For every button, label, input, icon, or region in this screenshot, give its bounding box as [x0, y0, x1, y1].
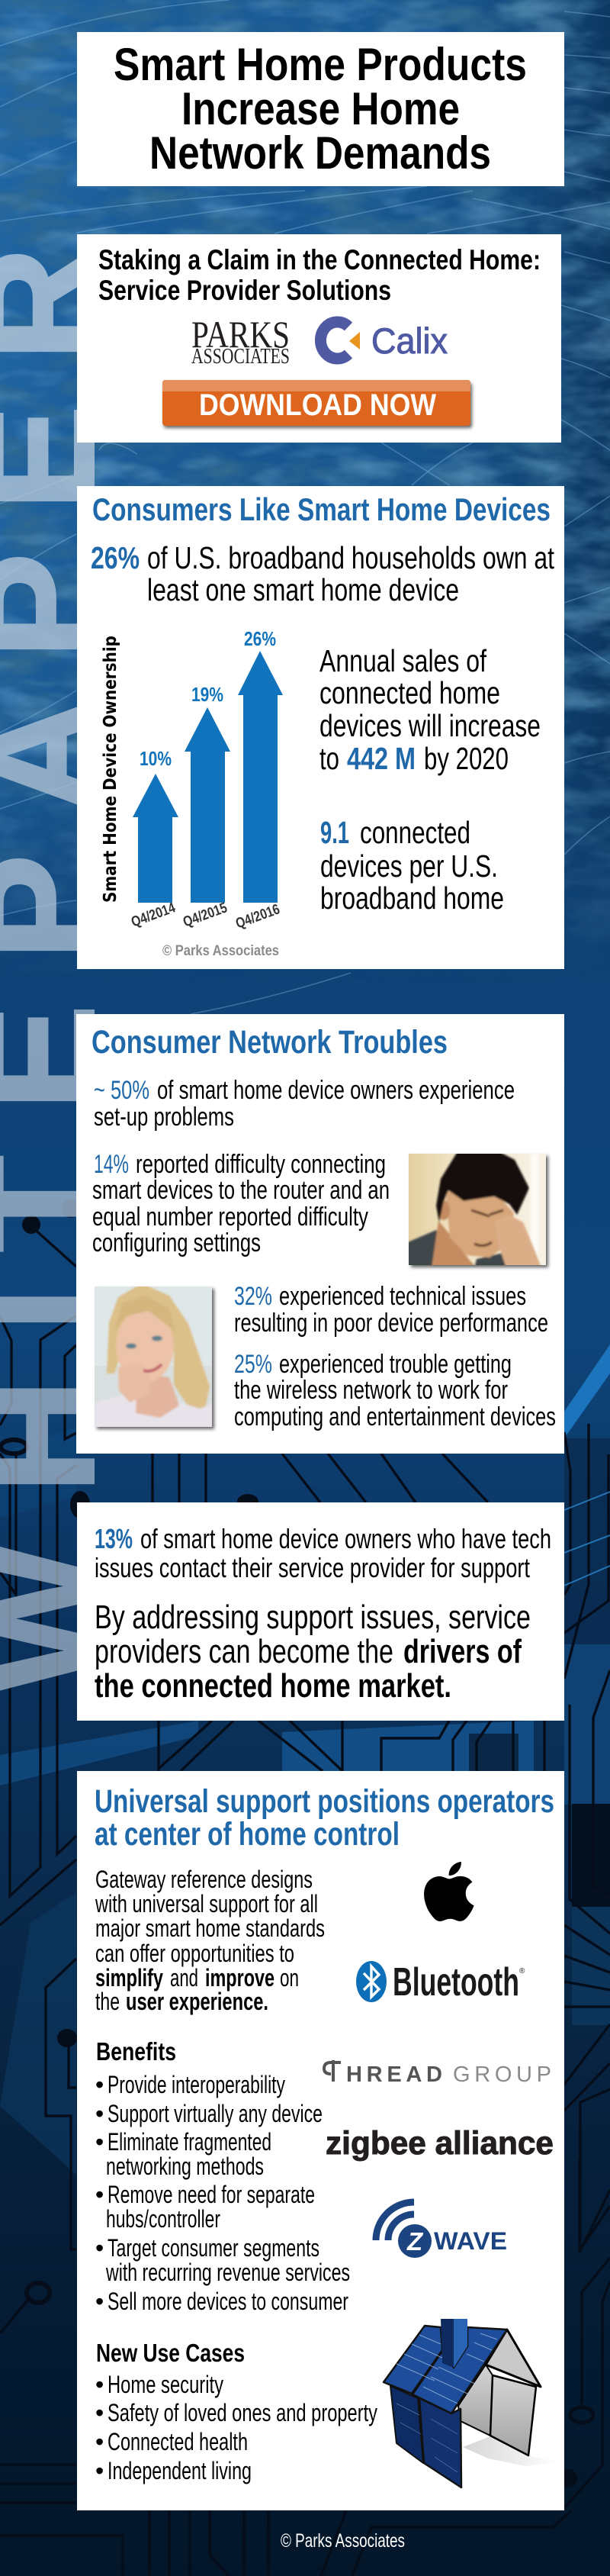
- new use cases list: [95, 2339, 377, 2484]
- benefits list: •: [95, 2181, 104, 2208]
- background: circuit nodes: [22, 1199, 577, 2487]
- value labels: 19%: [191, 683, 223, 706]
- benefits list: •: [95, 2071, 104, 2098]
- stat: connected devices per home: connected: [360, 815, 470, 850]
- logo: Parks Associates: PARKS: [191, 313, 290, 356]
- router difficulty stat: configuring settings: [92, 1228, 261, 1257]
- logo: Calix: [320, 320, 448, 361]
- footer credit: © Parks Associates: [281, 2530, 405, 2552]
- gateway paragraph: with universal support for all: [95, 1890, 318, 1918]
- logo: Parks Associates: [191, 313, 290, 369]
- quarter labels: Q4/2015: [181, 900, 230, 931]
- benefits list: with recurring revenue services: [105, 2259, 350, 2286]
- heading: Increase Home: [181, 83, 460, 134]
- inner wall left: [458, 2365, 493, 2436]
- stat: annual sales: connected home: [319, 675, 500, 710]
- stat: connected devices per home: [320, 815, 504, 916]
- set-up problems stat: set-up problems: [94, 1103, 234, 1132]
- logo: zigbee alliance: zigbee alliance: [326, 2125, 554, 2162]
- benefits list: Sell more devices to consumer: [108, 2288, 348, 2315]
- benefits list: networking methods: [106, 2153, 264, 2180]
- heading: Consumer Network Troubles: [92, 1024, 448, 1061]
- gable: [486, 2330, 541, 2387]
- key message: drivers of: [403, 1633, 522, 1670]
- benefits list: Eliminate fragmented: [108, 2128, 271, 2156]
- new use cases list: Safety of loved ones and property: [108, 2399, 377, 2426]
- download button: [162, 380, 472, 428]
- gateway paragraph: can offer opportunities to: [95, 1940, 294, 1967]
- key message: [95, 1599, 531, 1705]
- inner wall right: [490, 2375, 536, 2455]
- logo: Thread Group: HREAD: [346, 2062, 442, 2087]
- axis title: Smart Home Device Ownership: [101, 636, 120, 903]
- value labels: 10%: [140, 747, 172, 770]
- benefits list: •: [95, 2234, 104, 2262]
- stat: annual sales: to: [319, 741, 339, 776]
- white paper name: [98, 244, 541, 306]
- wireless trouble stat: 25%: [234, 1350, 272, 1379]
- heading: at center of home control: [95, 1816, 400, 1853]
- panel: consumers like smart home devices: [77, 486, 564, 969]
- benefits list: Target consumer segments: [108, 2234, 319, 2262]
- benefits list: [95, 2037, 350, 2315]
- router difficulty stat: smart devices to the router and an: [92, 1176, 390, 1205]
- stat: connected devices per home: devices per U.S.: [320, 848, 498, 884]
- logo: Bluetooth: ®: [519, 1967, 525, 1975]
- gateway paragraph: on: [280, 1964, 299, 1992]
- key message: the connected home market.: [95, 1667, 451, 1705]
- router difficulty stat: [92, 1150, 390, 1257]
- key message: providers can become the: [95, 1633, 393, 1670]
- new use cases list: Independent living: [108, 2457, 252, 2484]
- gateway paragraph: simplify: [95, 1964, 163, 1992]
- source credit: © Parks Associates: [162, 943, 279, 959]
- stat: annual sales: by 2020: [424, 741, 509, 776]
- value labels: [140, 627, 276, 770]
- illustration: solar panel house: [384, 2319, 559, 2487]
- stat: annual sales: [319, 643, 541, 776]
- value labels: 26%: [244, 627, 276, 650]
- service provider contact stat: [95, 1523, 551, 1583]
- new use cases list: Home security: [108, 2371, 223, 2398]
- wireless trouble stat: the wireless network to work for: [234, 1376, 508, 1405]
- new use cases list: New Use Cases: [96, 2339, 245, 2367]
- chimney: [441, 2319, 454, 2368]
- wireless trouble stat: [234, 1350, 556, 1431]
- heading: Network Demands: [149, 127, 491, 179]
- set-up problems stat: ~ 50%: [94, 1076, 149, 1105]
- logo: Calix: Calix: [371, 320, 448, 361]
- router difficulty stat: 14%: [94, 1150, 129, 1179]
- stat: annual sales: 442 M: [347, 741, 416, 776]
- panel: universal support: [77, 1771, 564, 2510]
- logo: Apple: [424, 1862, 474, 1921]
- stat: connected devices per home: 9.1: [320, 815, 349, 850]
- download button: DOWNLOAD NOW: [199, 388, 436, 422]
- panel: white paper download: [77, 234, 561, 443]
- router difficulty stat: reported difficulty connecting: [136, 1150, 386, 1179]
- benefits list: Benefits: [96, 2037, 176, 2066]
- wireless trouble stat: experienced trouble getting: [279, 1350, 512, 1379]
- ownership statement: [91, 540, 554, 607]
- roof panels: [384, 2326, 442, 2394]
- set-up problems stat: [94, 1076, 515, 1132]
- heading: Smart Home Products: [114, 39, 527, 90]
- benefits list: Remove need for separate: [108, 2181, 315, 2208]
- panel: title: [77, 32, 564, 186]
- new use cases list: •: [95, 2457, 104, 2484]
- arrow: Q4/2014: [133, 774, 178, 903]
- gateway paragraph: and: [170, 1964, 198, 1992]
- panel: consumer network troubles: [76, 1014, 564, 1454]
- logo: Z-Wave: Z: [406, 2227, 424, 2256]
- front wall panels: [390, 2386, 423, 2463]
- benefits list: •: [95, 2100, 104, 2127]
- new use cases list: •: [95, 2428, 104, 2455]
- gateway paragraph: the: [95, 1988, 120, 2015]
- white paper name: Service Provider Solutions: [98, 275, 391, 306]
- heading: [95, 1783, 554, 1853]
- logo: Thread Group: GROUP: [453, 2062, 551, 2087]
- new use cases list: Connected health: [108, 2428, 248, 2455]
- new use cases list: •: [95, 2371, 104, 2398]
- gateway paragraph: major smart home standards: [95, 1914, 325, 1942]
- logo: Bluetooth: [356, 1960, 525, 2004]
- ownership statement: 26%: [91, 540, 140, 575]
- panel: support issues: [77, 1502, 564, 1721]
- new use cases list: •: [95, 2399, 104, 2426]
- benefits list: Provide interoperability: [108, 2071, 285, 2098]
- logo: Z-Wave: WAVE: [434, 2227, 507, 2255]
- gateway paragraph: [95, 1866, 325, 2015]
- ownership statement: least one smart home device: [147, 572, 459, 607]
- stat: connected devices per home: broadband home: [320, 881, 504, 916]
- photo: tired woman: [92, 1283, 215, 1431]
- benefits list: •: [95, 2128, 104, 2156]
- technical issues stat: [234, 1282, 548, 1338]
- logo: Bluetooth: Bluetooth: [393, 1960, 519, 2004]
- gateway paragraph: Gateway reference designs: [95, 1866, 313, 1893]
- floor shadow: [463, 2436, 559, 2466]
- quarter labels: Q4/2016: [233, 901, 282, 932]
- gateway paragraph: improve: [205, 1964, 274, 1992]
- photo: frustrated man: [404, 1148, 548, 1274]
- background: light streaks: [0, 0, 610, 1014]
- router difficulty stat: equal number reported difficulty: [92, 1203, 368, 1232]
- gateway paragraph: user experience.: [126, 1988, 268, 2015]
- arrow: Q4/2015: [185, 707, 230, 903]
- arrow chart: device ownership: [101, 627, 283, 959]
- benefits list: •: [95, 2288, 104, 2315]
- background: circuit lines: [0, 1227, 610, 2576]
- technical issues stat: 32%: [234, 1282, 272, 1311]
- arrow: Q4/2016: [238, 651, 283, 903]
- heading: [114, 39, 527, 179]
- service provider contact stat: 13%: [95, 1523, 133, 1554]
- bright blue background lines: [564, 1492, 610, 1586]
- benefits list: Support virtually any device: [108, 2100, 323, 2127]
- stat: annual sales: Annual sales of: [319, 643, 486, 678]
- quarter labels: [129, 900, 282, 932]
- logo: Parks Associates: ASSOCIATES: [191, 345, 290, 369]
- benefits list: hubs/controller: [106, 2205, 220, 2233]
- quarter labels: Q4/2014: [129, 900, 178, 931]
- logo: Thread Group: [324, 2060, 551, 2087]
- stat: annual sales: devices will increase: [319, 708, 541, 743]
- technical issues stat: experienced technical issues: [279, 1282, 526, 1311]
- logo: Z-Wave: [376, 2202, 507, 2258]
